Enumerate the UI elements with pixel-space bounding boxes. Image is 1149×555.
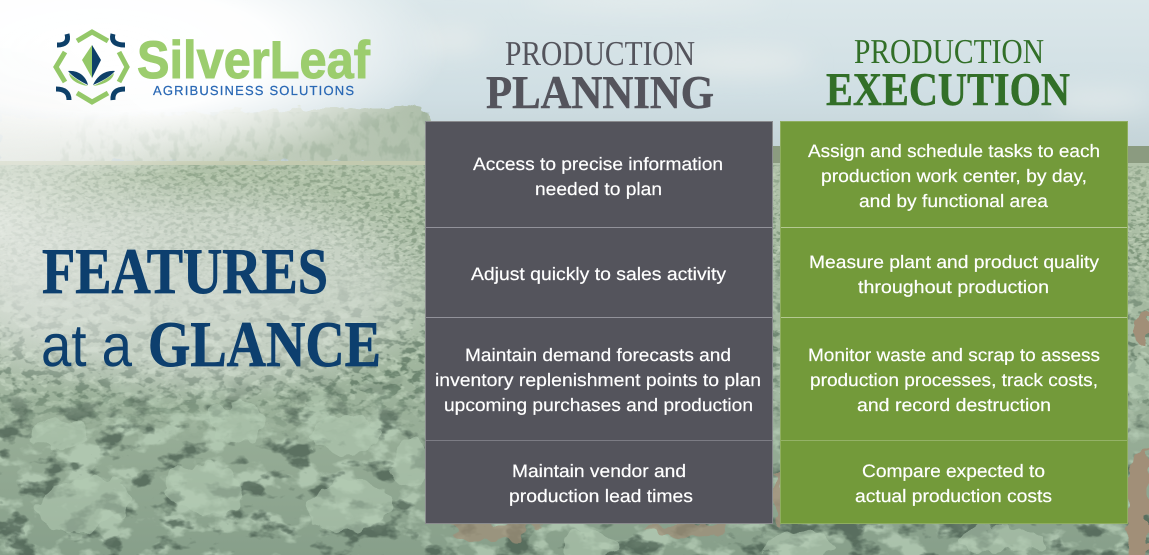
title: Features at a Glance: at a	[41, 312, 133, 379]
execution row 1: Assign and schedule tasks to each	[808, 141, 1100, 161]
heading: Production Planning: PRODUCTION	[505, 34, 695, 73]
planning row 1: Access to precise information	[473, 154, 723, 174]
heading: Production Execution: PRODUCTION	[854, 32, 1044, 71]
execution row 3: and record destruction	[857, 395, 1051, 415]
near rows	[0, 370, 1149, 555]
heading: Production Execution: EXECUTION	[826, 64, 1070, 116]
title: Features at a Glance: GLANCE	[148, 309, 381, 381]
execution row 2: throughout production	[858, 277, 1049, 297]
execution row 3	[808, 345, 1100, 415]
execution row 1	[808, 141, 1100, 211]
large cabbage leaves	[30, 356, 1149, 555]
planning row 4	[509, 461, 693, 506]
distant rows	[0, 165, 1149, 310]
execution row 4	[855, 461, 1052, 506]
heading: Production Execution	[826, 32, 1070, 116]
icon: hexagon leaf emblem	[56, 32, 127, 102]
heading: Production Planning: PLANNING	[486, 67, 714, 119]
middle rows	[0, 260, 1149, 430]
heading: Production Planning	[486, 34, 714, 119]
execution row 4: actual production costs	[855, 486, 1052, 506]
panel: production planning features	[426, 122, 772, 524]
execution row 1: production work center, by day,	[821, 166, 1087, 186]
planning row 1: needed to plan	[535, 179, 662, 199]
planning row 3: inventory replenishment points to plan	[435, 370, 761, 390]
planning row 3	[435, 345, 761, 415]
execution row 3: production processes, track costs,	[810, 370, 1098, 390]
planning row 3: Maintain demand forecasts and	[465, 345, 731, 365]
planning row 3: upcoming purchases and production	[444, 395, 753, 415]
logo: SilverLeaf Agribusiness Solutions	[56, 31, 370, 102]
title: Features at a Glance: FEATURES	[42, 236, 328, 308]
execution row 4: Compare expected to	[862, 461, 1045, 481]
soil patches	[440, 310, 1149, 555]
tagline: AGRIBUSINESS SOLUTIONS	[153, 83, 354, 98]
planning row 4: production lead times	[509, 486, 693, 506]
execution row 3: Monitor waste and scrap to assess	[808, 345, 1100, 365]
execution row 2	[809, 252, 1099, 297]
title: Features at a Glance	[41, 236, 381, 381]
execution row 1: and by functional area	[859, 191, 1049, 211]
panel: production execution features	[780, 122, 1128, 524]
planning row 2: Adjust quickly to sales activity	[471, 264, 726, 284]
planning row 1	[473, 154, 723, 199]
wordmark: SilverLeaf	[137, 31, 370, 90]
planning row 4: Maintain vendor and	[512, 461, 686, 481]
execution row 2: Measure plant and product quality	[809, 252, 1099, 272]
